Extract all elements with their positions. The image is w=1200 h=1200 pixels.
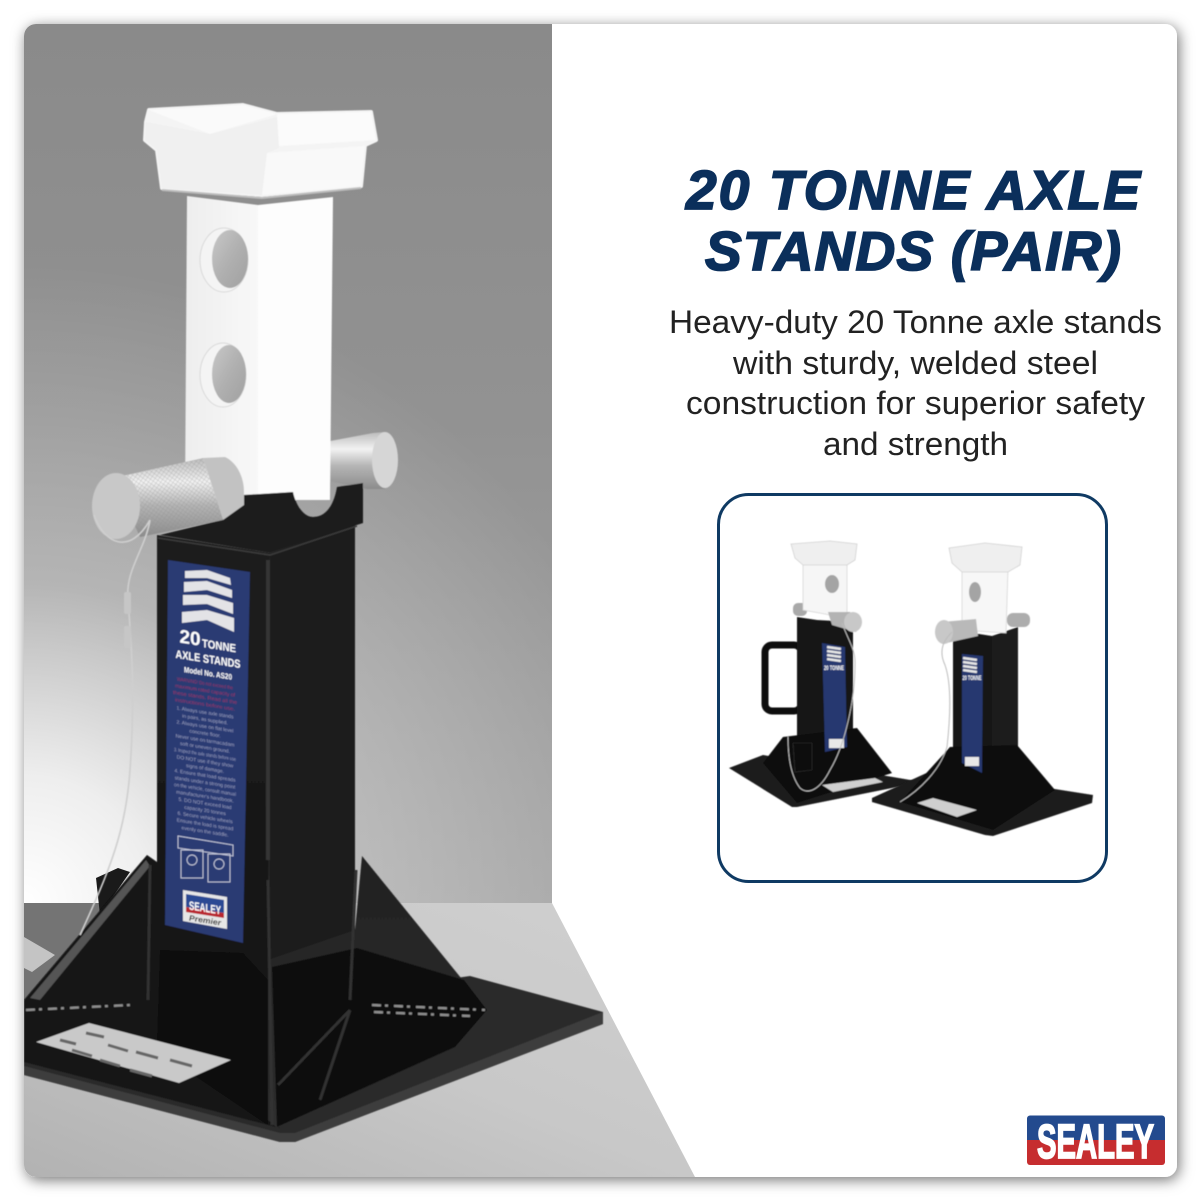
inset stand: left with handle xyxy=(729,541,922,807)
label warning and instructions: evenly on the saddle. xyxy=(181,825,229,839)
large axle stand xyxy=(24,105,603,1142)
label text: 20 TONNE xyxy=(962,676,982,682)
label text: AXLE STANDS xyxy=(176,649,241,671)
main black column xyxy=(157,525,355,1120)
floor shadow behind stand xyxy=(24,868,130,1000)
label warning and instructions: soft or uneven ground. xyxy=(180,741,230,755)
adjustment hole lower xyxy=(200,343,246,407)
left gusset xyxy=(24,855,280,1128)
carry handle xyxy=(765,645,801,711)
gusset xyxy=(763,728,892,803)
label warning and instructions: WARNING! Do not exceed the xyxy=(177,677,233,691)
label warning and instructions: stands under a strong point xyxy=(175,775,236,791)
label warning and instructions: in pairs, as supplied. xyxy=(182,713,228,727)
description text: with sturdy, welded steel xyxy=(732,345,1098,381)
label warning and instructions: 6. Secure vehicle wheels xyxy=(177,811,233,825)
label warning and instructions: concrete floor. xyxy=(189,729,221,739)
label sealey premier logo: SEALEY xyxy=(189,899,221,918)
label warning and instructions: 5. DO NOT exceed load xyxy=(178,797,232,811)
description text: construction for superior safety xyxy=(686,385,1145,421)
label warning and instructions: on the vehicle, consult manual xyxy=(174,782,236,798)
weld speckle xyxy=(26,1005,485,1016)
cable ferrules xyxy=(124,592,131,632)
blue product label xyxy=(165,560,250,943)
studio floor xyxy=(24,903,695,1177)
label warning and instructions: 4. Ensure that load spreads xyxy=(175,768,236,784)
body xyxy=(797,617,853,760)
label warning and instructions: signs of damage. xyxy=(186,763,224,775)
inset frame with product pair xyxy=(718,494,1106,882)
description text xyxy=(669,304,1162,462)
label sealey premier logo xyxy=(183,890,227,929)
black collar xyxy=(160,483,363,553)
label xyxy=(962,654,983,773)
cable xyxy=(900,632,952,802)
label warning and instructions: DO NOT use if they show xyxy=(177,755,234,770)
base plate xyxy=(24,976,603,1142)
panel: product photo xyxy=(24,24,695,1177)
plate sticker xyxy=(822,778,883,792)
inset stand: right xyxy=(872,543,1093,836)
label warning and instructions: 3. Inspect the axle stands before use xyxy=(174,747,236,763)
body xyxy=(953,630,992,780)
head xyxy=(791,541,857,565)
label xyxy=(822,643,847,752)
label text xyxy=(176,626,241,683)
cup xyxy=(793,743,812,772)
hole xyxy=(969,582,981,602)
label text: Model No. AS20 xyxy=(184,665,232,682)
hole xyxy=(825,575,839,593)
front pin xyxy=(935,619,978,644)
white saddle column xyxy=(185,196,333,500)
label text: 20 xyxy=(179,627,201,651)
title: STANDS (PAIR) xyxy=(705,220,1121,282)
label text: 20 TONNE xyxy=(824,666,844,672)
description text: and strength xyxy=(823,426,1008,462)
label logo xyxy=(965,757,979,766)
label warning and instructions: these stands. Read all the xyxy=(173,690,237,706)
sticker on base plate xyxy=(36,1023,231,1083)
rear pin xyxy=(793,603,807,616)
label warning and instructions: instructions before use. xyxy=(175,697,235,713)
white saddle head xyxy=(145,105,376,198)
label warning and instructions: manufacturer's handbook. xyxy=(176,789,234,805)
column xyxy=(803,562,847,619)
label stripes xyxy=(963,658,977,672)
label chevron stripes xyxy=(182,570,234,632)
label warning and instructions xyxy=(173,676,237,840)
gusset edge highlight xyxy=(30,860,150,1000)
column xyxy=(962,568,1008,633)
safety cable xyxy=(80,515,150,935)
adjustment hole upper xyxy=(200,228,248,292)
column lower reflection left xyxy=(157,950,268,1125)
gusset xyxy=(900,745,1055,830)
label warning and instructions: Never use on tarmacadam xyxy=(176,733,234,749)
label text: TONNE xyxy=(202,638,236,655)
title xyxy=(685,159,1142,282)
label warning and instructions: Ensure the load is spread xyxy=(177,818,233,832)
label stripes xyxy=(827,647,841,661)
front pin xyxy=(828,612,862,632)
label logo xyxy=(829,739,844,748)
plate sticker xyxy=(917,798,977,817)
rear locking pin xyxy=(325,432,398,489)
label warning and instructions: capacity 20 tonnes xyxy=(184,805,226,817)
label safety icons xyxy=(178,836,233,882)
cable xyxy=(788,623,855,791)
weld seams xyxy=(148,865,356,1125)
title: 20 TONNE AXLE xyxy=(685,159,1142,221)
knurled front locking pin xyxy=(92,457,244,539)
label warning and instructions: 2. Always use on flat level xyxy=(176,720,234,735)
welded gusset cone xyxy=(24,855,487,1128)
right gusset xyxy=(268,856,461,1128)
description text: Heavy-duty 20 Tonne axle stands xyxy=(669,304,1162,340)
head xyxy=(949,543,1022,572)
panel: text and inset xyxy=(669,159,1165,1169)
label sealey premier logo: Premier xyxy=(189,914,222,928)
base plate xyxy=(729,755,922,807)
label warning and instructions: 1. Always use axle stands xyxy=(176,706,234,721)
label warning and instructions: maximum rated capacity of xyxy=(175,683,236,699)
studio wall xyxy=(24,24,552,904)
rear pin xyxy=(1007,613,1030,627)
base plate xyxy=(872,770,1093,836)
collar lower lip xyxy=(158,526,357,555)
gusset lower reflection right xyxy=(272,948,487,1127)
